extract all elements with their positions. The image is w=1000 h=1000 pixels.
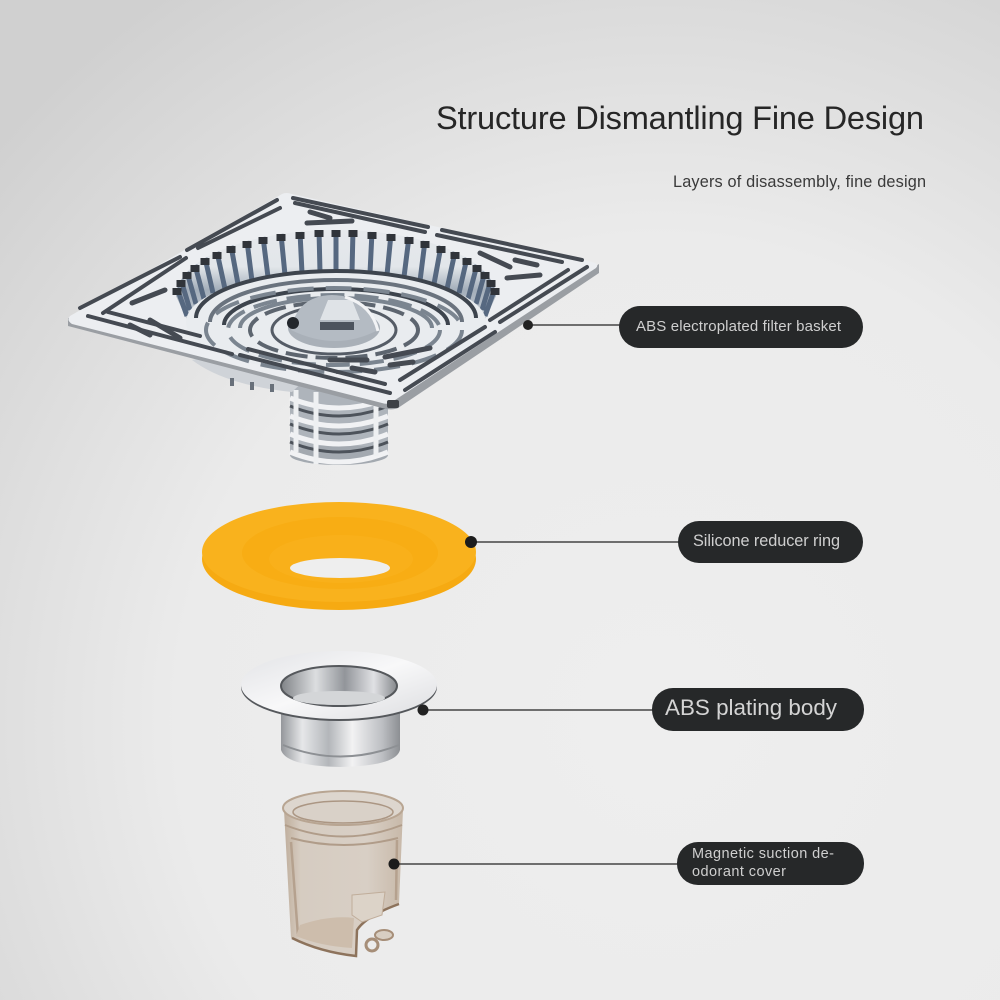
basket wall caps [177,230,495,295]
plate edge [68,264,599,409]
basket wall posts [177,230,495,316]
plating body [241,651,437,767]
label: ABS electroplated filter basket [619,306,863,348]
label: Silicone reducer ring [678,521,863,563]
lower basket stem [290,385,388,465]
label: ABS plating body: ABS plating body [665,695,838,720]
title: Structure Dismantling Fine Design [436,99,924,136]
basket floor rings [186,271,486,372]
callout: body connector [418,704,653,716]
subtitle: Layers of disassembly, fine design [673,173,926,191]
filter basket illustration [68,193,599,465]
plate top face [68,193,597,404]
label: ABS plating body [652,688,864,731]
deodorant cover cup [283,791,403,956]
callout: cup connector [388,858,678,870]
plate slots [80,198,587,393]
label: Magnetic suction de-odorant cover: Magnetic suction de- [692,846,834,862]
label: Magnetic suction de-odorant cover: odorant cover [692,864,786,880]
silicone reducer ring [202,502,476,610]
callout: filter basket connector [523,320,620,330]
label: Silicone reducer ring: Silicone reducer ring [693,532,840,550]
callout: ring connector [465,536,679,548]
plate corner shadow [387,400,399,408]
label: ABS electroplated filter basket: ABS electroplated filter basket [636,318,842,335]
label: Magnetic suction de-odorant cover [677,842,864,885]
basket wall [176,230,496,322]
lower basket flange [192,352,310,392]
centre dome [287,295,380,348]
